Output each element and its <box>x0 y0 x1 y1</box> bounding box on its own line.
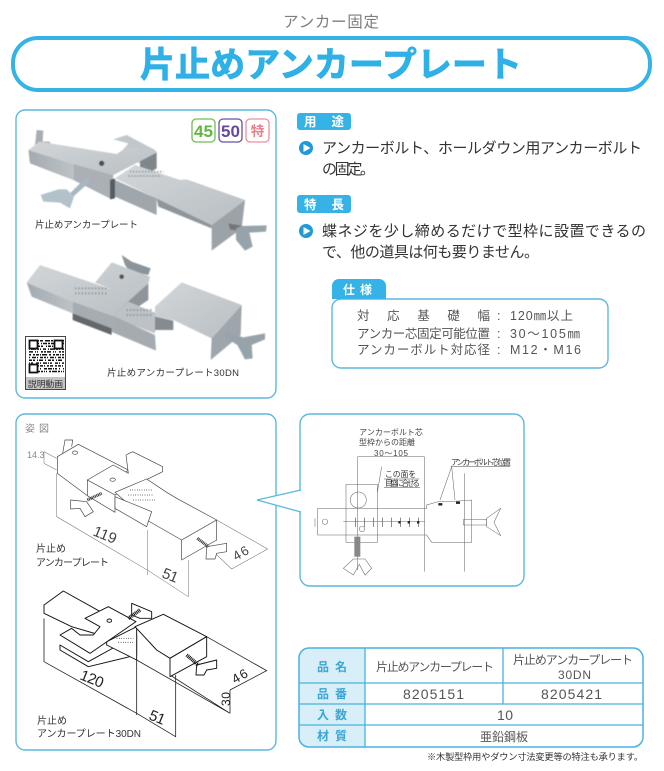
panel: specifications: 120㎜以上 <box>510 309 573 323</box>
features text: で、他の道具は何も要りません。 <box>322 244 539 261</box>
footnote: ※木製型枠用やダウン寸法変更等の特注も承ります。 <box>427 751 643 762</box>
panel: usage and features <box>297 113 646 261</box>
panel: product photos <box>16 110 276 398</box>
label: anchor plate 30DN: 片止めアンカープレート30DN <box>107 367 239 379</box>
subtitle: アンカー固定 <box>283 13 379 31</box>
title banner: 片止めアンカープレート <box>140 46 522 85</box>
drawing: anchor plate 30DN <box>44 591 267 737</box>
dimension: 14.3: 14.3 <box>27 450 45 460</box>
title banner <box>13 38 650 90</box>
dimension: 51: 51 <box>160 565 181 587</box>
table header column: 品 名 <box>317 659 347 674</box>
panel: specifications <box>332 279 608 368</box>
panel: specifications: M12・M16 <box>510 343 581 357</box>
label: anchor plate: アンカープレート <box>36 557 109 569</box>
badges: compatible sizes: 45 <box>194 122 213 141</box>
badges: compatible sizes: 特 <box>251 124 265 139</box>
table header column: 材 質 <box>317 728 347 743</box>
table values: 亜鉛鋼板 <box>480 730 528 744</box>
features text: 蝶ネジを少し締めるだけで型枠に設置できるの <box>322 223 646 240</box>
photo: anchor plate 30DN <box>27 255 265 360</box>
table header column <box>317 659 347 743</box>
bullet icon <box>299 224 313 238</box>
callout arrow <box>257 490 302 512</box>
label: anchor plate 30DN: アンカープレート30DN <box>37 728 141 740</box>
dimension: 120: 120 <box>78 667 106 692</box>
table values <box>376 653 633 744</box>
table header column: 品 番 <box>317 687 347 701</box>
label: anchor plate 30DN: 片止め <box>37 714 67 727</box>
panel: usage and features: 特 長 <box>304 197 344 212</box>
table header column: 入 数 <box>317 707 347 722</box>
panel: usage and features: 用 途 <box>304 114 344 129</box>
table values: 8205421 <box>541 686 602 702</box>
panel: specifications: 仕様 <box>343 282 372 297</box>
label: anchor plate: 片止めアンカープレート <box>35 219 138 231</box>
dimension: 119: 119 <box>91 523 119 548</box>
dimension: 46: 46 <box>230 543 251 564</box>
annotation: align face: この面を <box>385 470 416 479</box>
panel: plan detail callout <box>257 414 524 586</box>
panel: isometric drawings <box>16 414 276 750</box>
table values: 片止めアンカープレート <box>513 653 633 667</box>
bullet icon <box>299 141 313 155</box>
annotation: align face: 目盛に合せる <box>385 478 420 488</box>
dimension: 30: 30 <box>219 692 233 706</box>
panel: specifications: アンカー芯固定可能位置 <box>357 326 490 341</box>
drawing: plan view <box>315 457 510 575</box>
annotation: distance from form: 型枠からの距離 <box>359 437 415 447</box>
panel: specifications: 30～105㎜ <box>510 327 580 341</box>
badges: compatible sizes <box>192 119 269 142</box>
table values: 片止めアンカープレート <box>376 660 494 674</box>
panel: specifications: 対 応 基 礎 幅 <box>357 308 490 323</box>
drawing: anchor plate <box>44 440 268 597</box>
table values: 30DN <box>558 668 591 682</box>
table: product specifications <box>299 648 643 747</box>
badge: features <box>297 195 351 213</box>
panel: specifications: : <box>497 309 500 323</box>
table values: 8205151 <box>403 686 464 702</box>
annotation: distance from form: 30～105 <box>374 449 409 458</box>
panel: specifications: : <box>497 327 500 341</box>
usage text: アンカーボルト、ホールダウン用アンカーボルト <box>322 140 642 157</box>
annotation: bolt position: アンカーボルト芯位置 <box>451 457 511 467</box>
dimension: 46: 46 <box>229 666 250 687</box>
heading: 姿図 <box>25 422 49 435</box>
photo: anchor plate <box>28 130 267 251</box>
badges: compatible sizes: 50 <box>221 122 240 141</box>
label: anchor plate: 片止め <box>36 542 66 555</box>
QR code: 説明動画 <box>28 378 63 389</box>
dimension: 51: 51 <box>147 707 168 729</box>
badge: usage <box>297 113 351 130</box>
annotation: distance from form: アンカーボルト芯 <box>359 428 423 437</box>
QR code <box>26 336 66 390</box>
panel: specifications: アンカーボルト対応径 <box>357 343 490 357</box>
usage text: の固定。 <box>322 161 375 178</box>
panel: specifications: : <box>497 343 500 357</box>
table values: 10 <box>497 707 513 723</box>
